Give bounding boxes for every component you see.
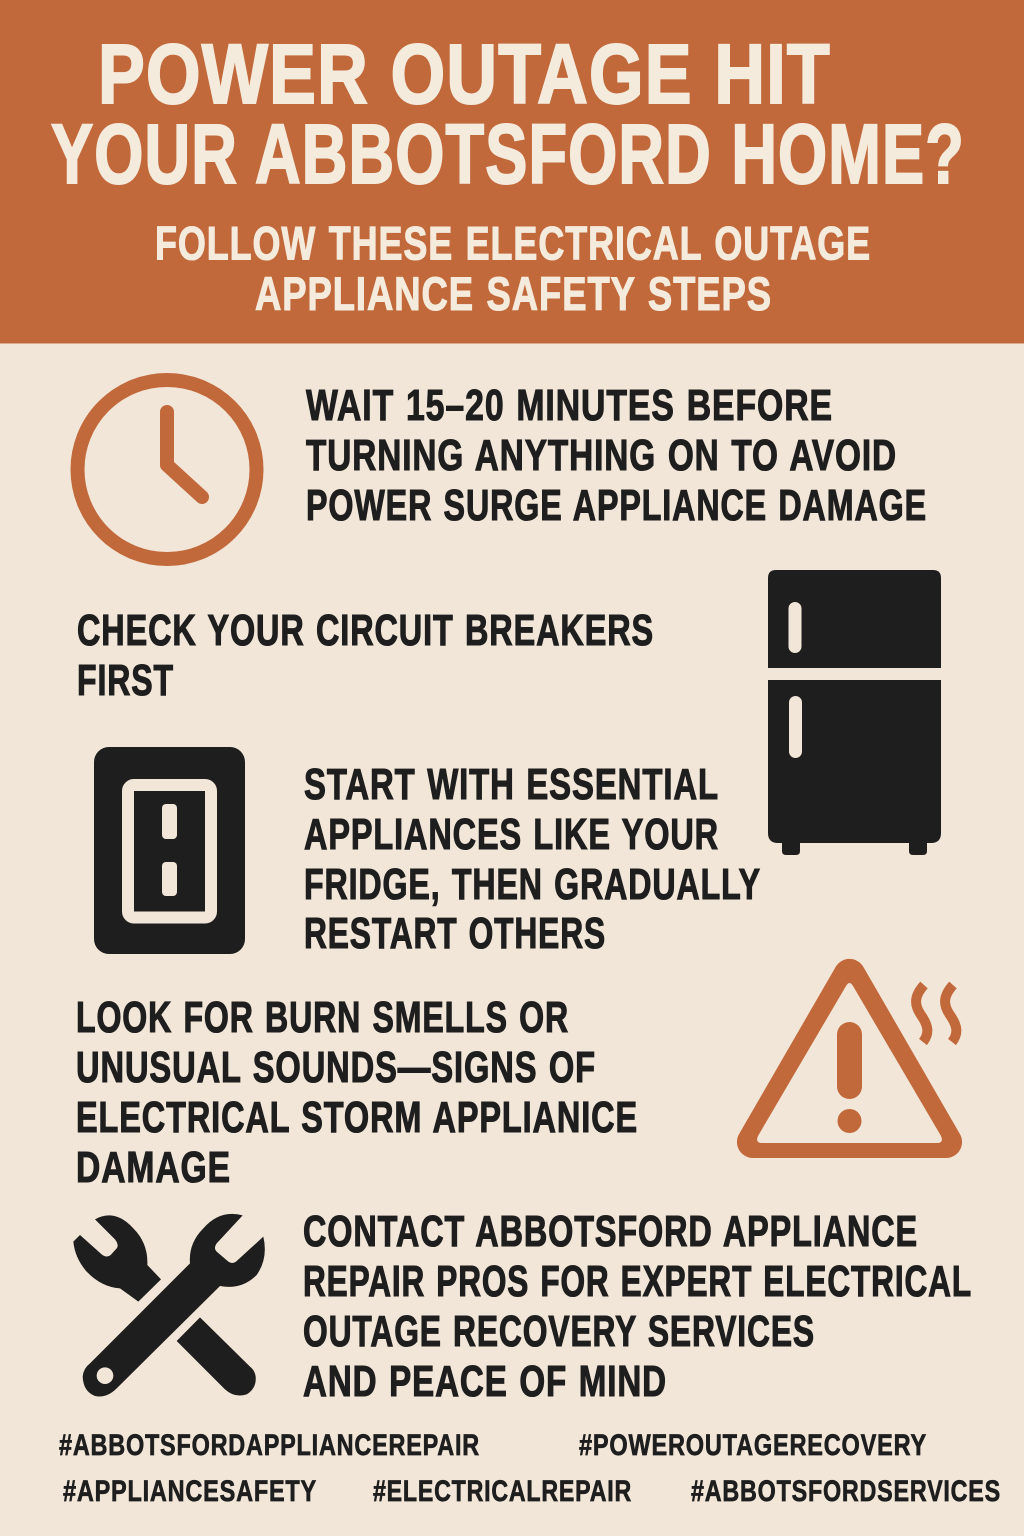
step 2 text: FIRST [77,656,174,705]
icon: warning triangle with burn smell [737,959,962,1158]
step 2 text: CHECK YOUR CIRCUIT BREAKERS [77,606,654,655]
step 4 text: UNUSUAL SOUNDS—SIGNS OF [76,1043,596,1092]
step 4 text: ELECTRICAL STORM APPLIANICE [76,1093,638,1142]
step 3 text: FRIDGE, THEN GRADUALLY [304,860,761,909]
step 2 text [77,606,654,705]
subtitle [155,216,871,320]
subtitle: APPLIANCE SAFETY STEPS [255,267,772,320]
step 3 text: APPLIANCES LIKE YOUR [304,810,719,859]
title [51,27,965,201]
hashtags: #APPLIANCESAFETY [63,1475,317,1508]
step 3 text [304,760,761,958]
step 5 text: OUTAGE RECOVERY SERVICES [303,1307,815,1356]
step 1 text: WAIT 15–20 MINUTES BEFORE [306,381,833,430]
step 1 text [306,381,927,530]
header banner [0,0,1024,344]
hashtags: #ABBOTSFORDAPPLIANCEREPAIR [59,1429,480,1462]
icon: fridge [768,570,941,855]
step 4 text [76,993,638,1192]
icon: wall outlet [94,747,245,954]
title: POWER OUTAGE HIT [98,27,831,121]
step 3 text: RESTART OTHERS [304,909,606,958]
icon: clock [78,380,256,559]
hashtags [59,1429,1001,1508]
step 3 text: START WITH ESSENTIAL [304,760,719,809]
hashtags: #ELECTRICALREPAIR [373,1475,632,1508]
icon: crossed wrenches [73,1214,265,1396]
step 5 text: AND PEACE OF MIND [303,1357,667,1406]
hashtags: #POWEROUTAGERECOVERY [579,1429,927,1462]
step 5 text [303,1207,972,1406]
step 4 text: DAMAGE [76,1143,231,1192]
step 4 text: LOOK FOR BURN SMELLS OR [76,993,569,1042]
